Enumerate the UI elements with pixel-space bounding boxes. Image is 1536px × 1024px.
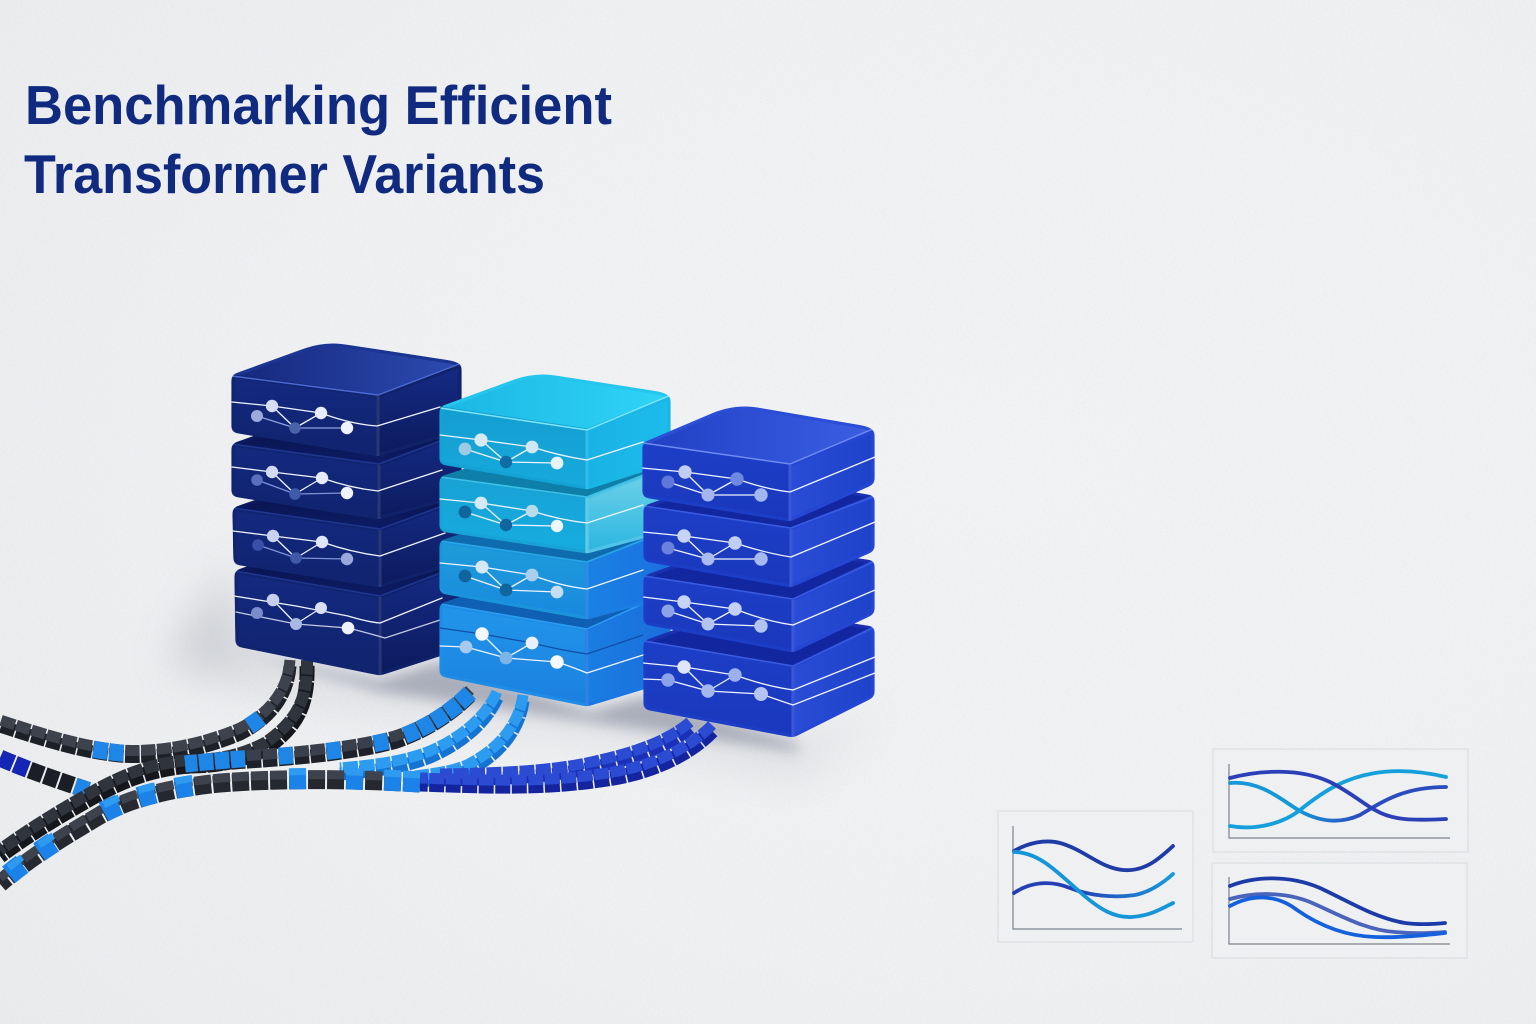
- block: cyan 1: [440, 376, 671, 489]
- strand: indigo upper: [440, 722, 690, 780]
- strand: left short: [0, 758, 90, 791]
- block: cyan 4: [440, 572, 671, 706]
- block: blue 2: [643, 474, 875, 587]
- title: Transformer Variants: [24, 143, 545, 205]
- data strands of small cubes: [0, 660, 712, 884]
- block: navy 4: [234, 540, 462, 675]
- stack: royal blue column: [642, 408, 875, 737]
- title: [24, 74, 612, 205]
- block: navy 1: [232, 345, 462, 456]
- strand: light blue one: [340, 692, 497, 774]
- title: Benchmarking Efficient: [25, 74, 612, 136]
- chart panel: top right: [1213, 749, 1468, 852]
- strand: indigo lower: [420, 725, 712, 786]
- stack: navy column: [232, 345, 462, 675]
- strand: dark second: [0, 660, 307, 856]
- chart panel: bottom left: [998, 811, 1193, 942]
- strand: dark top left: [0, 660, 290, 757]
- block: cyan 2: [440, 446, 671, 553]
- block: blue 3: [643, 543, 875, 652]
- block: blue 1: [642, 408, 875, 521]
- chart panel: bottom right: [1212, 863, 1467, 958]
- block: cyan 3: [440, 510, 671, 619]
- stack: cyan column: [440, 376, 671, 706]
- strand: light blue two: [415, 695, 523, 782]
- floor shadows under stacks: [165, 560, 885, 770]
- strand: dark bottom: [0, 772, 420, 884]
- block: blue 4: [643, 608, 875, 737]
- strand: mixed middle: [185, 690, 470, 767]
- block: navy 3: [233, 477, 462, 587]
- block: navy 2: [232, 412, 462, 519]
